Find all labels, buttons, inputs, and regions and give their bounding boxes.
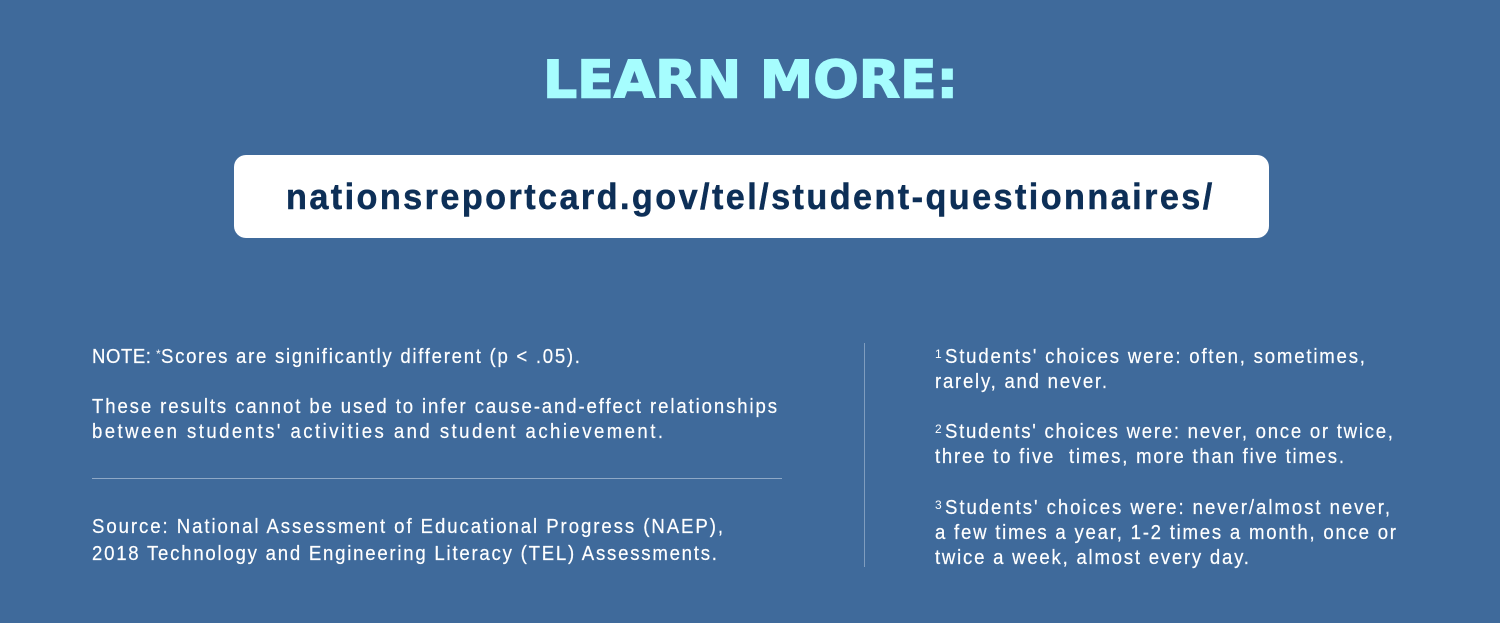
note: significance: * xyxy=(156,347,161,361)
right footnotes xyxy=(935,346,1397,569)
footnote 3: twice a week, almost every day. xyxy=(935,547,1249,569)
footnote 2: Students' choices were: never, once or twice, xyxy=(945,421,1393,443)
left notes xyxy=(92,346,782,565)
footnote 3 xyxy=(935,497,1397,569)
footnote 1 xyxy=(935,346,1365,393)
title: LEARN MORE: xyxy=(543,50,958,110)
note: significance: NOTE: xyxy=(92,346,151,368)
footnote 3: a few times a year, 1-2 times a month, once or xyxy=(935,522,1397,544)
note: cause and effect xyxy=(92,396,777,443)
footnote 3: Students' choices were: never/almost never, xyxy=(945,497,1390,519)
footnote 1: 1 xyxy=(935,347,942,361)
footnote 1: Students' choices were: often, sometimes, xyxy=(945,346,1365,368)
footnote 2 xyxy=(935,421,1393,468)
url box xyxy=(234,155,1269,238)
note: cause and effect: between students' activities and student achievement. xyxy=(92,421,663,443)
note: cause and effect: These results cannot be used to infer cause-and-effect relationships xyxy=(92,396,777,418)
footnote 3: 3 xyxy=(935,498,942,512)
note: significance: Scores are significantly different (p < .05). xyxy=(161,346,580,368)
source xyxy=(92,516,723,565)
url text: nationsreportcard.gov/tel/student-questionnaires/ xyxy=(286,177,1212,217)
footnote 1: rarely, and never. xyxy=(935,371,1107,393)
source: Source: National Assessment of Educational Progress (NAEP), xyxy=(92,516,723,538)
footnote 2: three to five times, more than five times. xyxy=(935,446,1344,468)
footnote 2: 2 xyxy=(935,422,942,436)
source: 2018 Technology and Engineering Literacy (TEL) Assessments. xyxy=(92,543,717,565)
